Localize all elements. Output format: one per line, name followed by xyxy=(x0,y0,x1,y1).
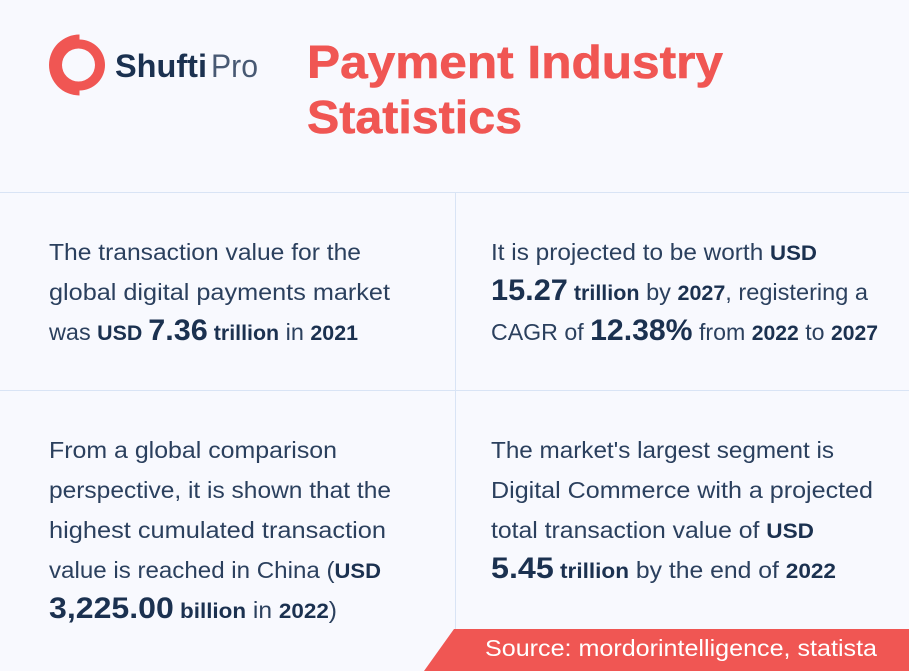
panel: 2027 projection: 15.27 trillion by 2027, registering a xyxy=(491,274,868,307)
panel: 2027 projection: It is projected to be worth USD xyxy=(491,239,817,265)
panel: China comparison: value is reached in China ( USD xyxy=(49,557,381,583)
title: Payment Industry xyxy=(307,36,723,88)
title: Statistics xyxy=(307,91,522,143)
panel: China comparison: perspective, it is shown that the xyxy=(49,477,391,503)
panel: 2027 projection: CAGR of 12.38% from 2022 to 2027 xyxy=(491,314,878,347)
source banner xyxy=(424,629,909,671)
panel: China comparison: From a global comparison xyxy=(49,437,337,463)
panel: 2021 transaction value: was USD 7.36 trillion in 2021 xyxy=(48,314,358,347)
source banner: Source: mordorintelligence, statista xyxy=(485,635,877,661)
panel: 2021 transaction value: global digital payments market xyxy=(49,279,391,305)
panel: China comparison xyxy=(49,437,391,625)
panel: China comparison: highest cumulated transaction xyxy=(49,517,386,543)
panel: Digital Commerce segment: Digital Commerce with a projected xyxy=(491,477,873,503)
logo: Shufti Pro xyxy=(49,34,258,96)
logo wordmark xyxy=(115,48,258,84)
logo wordmark: Shufti xyxy=(115,48,207,84)
icon: logo ring xyxy=(49,34,105,96)
panel: Digital Commerce segment: total transaction value of USD xyxy=(491,517,814,543)
panel: China comparison: 3,225.00 billion in 2022) xyxy=(49,592,337,625)
panel: 2027 projection xyxy=(491,239,878,347)
panel: 2021 transaction value xyxy=(48,239,391,347)
logo wordmark: Pro xyxy=(211,48,258,84)
panel: Digital Commerce segment xyxy=(491,437,873,585)
title xyxy=(307,36,723,143)
panel: 2021 transaction value: The transaction value for the xyxy=(49,239,361,265)
panel: Digital Commerce segment: 5.45 trillion by the end of 2022 xyxy=(491,552,836,585)
panel: Digital Commerce segment: The market's largest segment is xyxy=(491,437,834,463)
